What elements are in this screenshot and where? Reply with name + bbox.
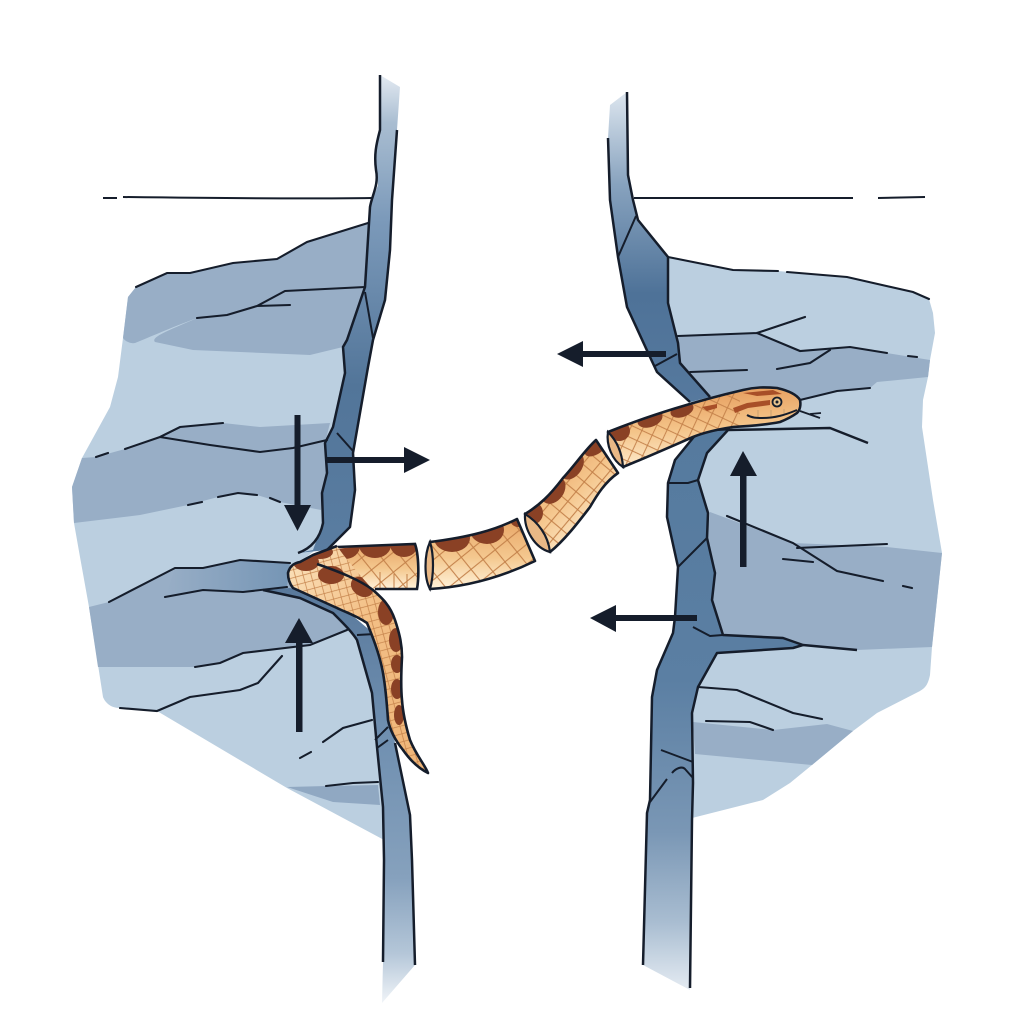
arrow: up right (730, 451, 757, 567)
left block base (72, 223, 384, 840)
eye (772, 398, 782, 406)
head markings (702, 390, 782, 413)
fault strip: upper left (298, 75, 400, 553)
cut face (608, 432, 623, 467)
snake: tail and body loop (285, 545, 430, 777)
snake: body segment 1 (337, 542, 420, 590)
arrow: up left (285, 618, 313, 732)
cut face (426, 542, 433, 589)
snake: body segment 3 (524, 438, 620, 554)
left rock band 3 (89, 560, 347, 667)
right rock band 3 (693, 722, 853, 765)
arrow: down left (284, 415, 311, 531)
left rock band 2 (72, 423, 330, 523)
horizon line: right (634, 197, 925, 198)
fault strip: lower right (643, 427, 868, 990)
panel: left rock block (72, 223, 384, 840)
left rock band 4 (287, 785, 380, 805)
cut face (525, 514, 550, 552)
right block base (668, 257, 942, 818)
arrow: left upper (557, 341, 666, 367)
fault strip: upper right (608, 92, 710, 402)
head lip ticks (758, 409, 784, 417)
left dark wedge (165, 560, 290, 597)
tongue (800, 411, 821, 418)
horizon line: left (103, 197, 372, 198)
loop markings (293, 545, 404, 725)
panel: right rock block (668, 257, 942, 818)
crack lines: right block (668, 257, 929, 730)
snake: body segment 2 (424, 518, 536, 592)
mouth (747, 410, 797, 418)
right rock band 1 (678, 333, 930, 400)
arrow: right (327, 447, 430, 473)
arrow: left lower (590, 605, 697, 632)
left rock band 1 (123, 223, 368, 355)
fault strip: lower left (263, 588, 415, 1003)
snake: head segment (605, 385, 821, 470)
cream belly scale ticks (380, 572, 407, 589)
loop outline (288, 546, 428, 773)
right rock band 2 (707, 512, 942, 650)
crack lines: left block (96, 223, 378, 786)
